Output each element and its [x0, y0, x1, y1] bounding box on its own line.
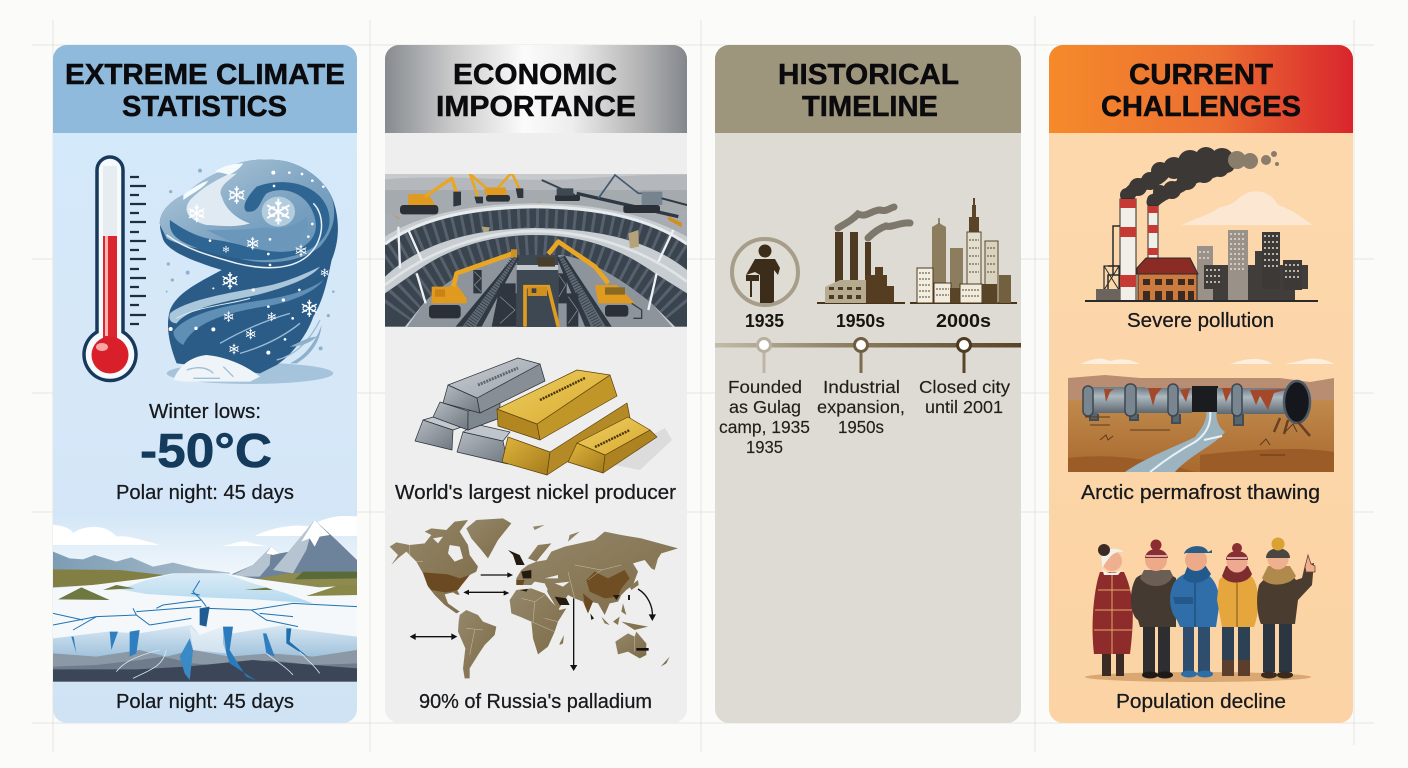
- chart: world trade map: [390, 518, 678, 678]
- text: winter lows: Winter lows:: [149, 401, 261, 423]
- lower left excavator: [429, 249, 517, 318]
- resident in brown coat with raised hand: [1257, 538, 1315, 678]
- heading: historical timeline: HISTORICAL: [778, 59, 959, 91]
- heading band: economic: [385, 45, 687, 133]
- text: palladium share: 90% of Russia's palladium: [419, 691, 652, 713]
- heading: extreme climate statistics: [65, 59, 345, 123]
- label: 2000s: 2000s: [936, 310, 991, 331]
- heading: extreme climate statistics: STATISTICS: [122, 91, 287, 123]
- dark conveyor machinery: [392, 175, 687, 248]
- icon: 2000s city skyline: [910, 198, 1017, 303]
- text: industrial expansion: expansion,: [817, 397, 905, 417]
- text: closed city: [919, 377, 1010, 417]
- resident in red coat: [1093, 544, 1133, 676]
- panel: current challenges: [1049, 45, 1353, 723]
- text: closed city: Closed city: [919, 377, 1010, 397]
- icon: blizzard swirl: [160, 159, 338, 384]
- heading: historical timeline: TIMELINE: [802, 91, 938, 123]
- label: 1935: 1935: [745, 310, 784, 331]
- heading: economic importance: IMPORTANCE: [436, 91, 636, 123]
- heading band: current: [1049, 45, 1353, 133]
- text: founded as gulag camp: camp, 1935: [719, 417, 810, 437]
- text: industrial expansion: [817, 377, 905, 437]
- label: 1950s: 1950s: [836, 310, 885, 331]
- illustration: group of residents: [1085, 538, 1315, 682]
- heading band: extreme climate: [53, 45, 357, 133]
- text: population decline: Population decline: [1116, 691, 1286, 713]
- text: polar night repeat: Polar night: 45 days: [116, 691, 294, 713]
- text: severe pollution: Severe pollution: [1127, 310, 1274, 332]
- heading: extreme climate statistics: EXTREME CLIMATE: [65, 59, 345, 91]
- text: founded as gulag camp: as Gulag: [729, 397, 801, 417]
- panel: extreme climate statistics: [53, 45, 357, 723]
- resident in orange jacket: [1217, 543, 1258, 676]
- text: industrial expansion: Industrial: [823, 377, 900, 397]
- heading: current challenges: CHALLENGES: [1101, 91, 1301, 123]
- resident in blue jacket: [1170, 546, 1220, 678]
- heading: current challenges: CURRENT: [1129, 59, 1273, 91]
- icon: 1935 worker in circle: [732, 239, 798, 305]
- heading: current challenges: [1101, 59, 1301, 123]
- illustration: ruptured pipeline on thawing ground: [1068, 359, 1334, 472]
- stat: minus 50 degrees: -50°C: [140, 425, 272, 478]
- illustration: silver and gold bars: [415, 358, 672, 475]
- timeline axis with nodes: [715, 338, 1021, 373]
- lower right excavator: [537, 242, 642, 318]
- text: founded as gulag camp: Founded: [728, 377, 802, 397]
- heading band: historical: [715, 45, 1021, 133]
- illustration: cracked permafrost landscape: [53, 510, 357, 682]
- text: permafrost thawing: Arctic permafrost thawing: [1081, 482, 1320, 504]
- text: industrial expansion: 1950s: [838, 417, 884, 437]
- heading: historical timeline: [778, 59, 959, 123]
- icon: 1950s factory: [817, 207, 910, 303]
- heading: economic importance: ECONOMIC: [453, 59, 617, 91]
- panel: historical timeline: [715, 45, 1021, 723]
- illustration: open pit mine: [385, 170, 687, 330]
- text: polar night: Polar night: 45 days: [116, 482, 294, 504]
- icon: thermometer: [84, 157, 146, 381]
- text: founded as gulag camp: [719, 377, 810, 457]
- text: founded as gulag camp: 1935: [746, 437, 783, 457]
- panel: economic importance: [385, 45, 687, 723]
- upper middle excavator: [470, 173, 523, 203]
- text: closed city: until 2001: [925, 397, 1003, 417]
- resident in dark parka: [1131, 540, 1176, 678]
- illustration: polluting factory and city: [1085, 147, 1318, 301]
- text: largest nickel producer: World's largest nickel producer: [395, 482, 676, 504]
- upper left excavator: [400, 178, 461, 214]
- heading: economic importance: [436, 59, 636, 123]
